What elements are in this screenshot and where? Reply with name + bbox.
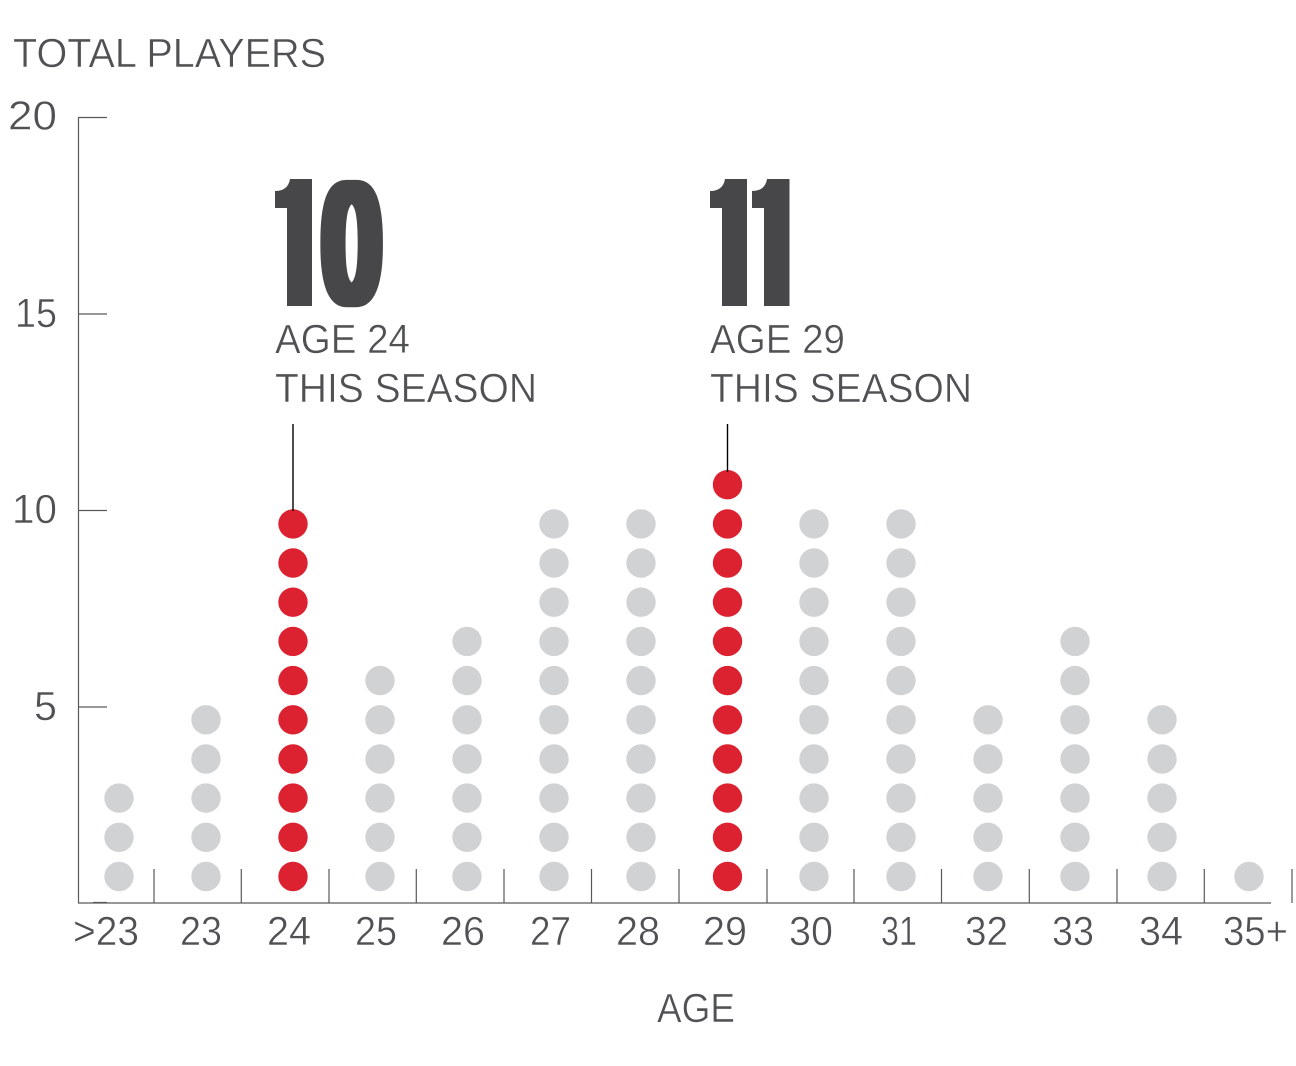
x-axis labels: 34: [1139, 908, 1183, 954]
callout: age 24: [275, 179, 534, 511]
y axis with tick marks: [78, 117, 107, 903]
y-axis labels: 5: [34, 683, 57, 729]
y-axis title: TOTAL PLAYERS: [13, 30, 326, 76]
callout: age 29: [710, 179, 969, 472]
caption: age 24 this season: THIS SEASON: [275, 365, 537, 411]
leader line: [292, 424, 294, 511]
dot column: age 25: [365, 666, 395, 891]
x-axis labels: 26: [441, 908, 485, 954]
dot column: age 32: [973, 705, 1003, 891]
dot column: age 29 highlighted: [713, 470, 742, 891]
x-axis labels: 27: [530, 908, 571, 954]
dot column: under 23: [104, 783, 134, 891]
dot column: age 24 highlighted: [278, 509, 308, 891]
dot column: age 23: [191, 705, 221, 891]
dot column: age 30: [799, 509, 829, 891]
y-axis labels: 20: [8, 92, 57, 138]
dot column: age 31: [886, 509, 916, 891]
big number 10: [275, 179, 383, 308]
dot column: age 27: [539, 509, 569, 891]
caption: age 29 this season: [710, 316, 972, 411]
x-axis labels: 33: [1052, 908, 1094, 954]
x-axis labels: 30: [789, 908, 833, 954]
x-axis labels: >23: [73, 908, 139, 954]
big number 11: [710, 179, 790, 306]
dot column: age 34: [1147, 705, 1177, 891]
x-axis labels: 23: [180, 908, 222, 954]
x-axis labels: 25: [355, 908, 397, 954]
x-axis labels: 29: [703, 908, 747, 954]
caption: age 29 this season: AGE 29: [710, 316, 845, 362]
big number 11: 1: [744, 141, 806, 343]
dot column: 35 and over: [1234, 862, 1264, 891]
dot column: age 33: [1060, 627, 1090, 891]
x-axis labels: 31: [881, 908, 917, 954]
big number 10: 0: [321, 146, 382, 341]
x-axis labels: [73, 908, 1288, 954]
y-axis labels: [8, 92, 57, 729]
caption: age 24 this season: [275, 316, 537, 411]
x-axis labels: 35+: [1223, 908, 1288, 954]
x-axis labels: 28: [616, 908, 660, 954]
x-axis labels: 32: [965, 908, 1008, 954]
y-axis labels: 10: [12, 486, 57, 532]
x-axis title: AGE: [657, 985, 735, 1031]
dot column: age 26: [452, 627, 482, 891]
caption: age 29 this season: THIS SEASON: [710, 365, 972, 411]
x axis with tick marks: [78, 869, 1292, 903]
dot column: age 28: [626, 509, 656, 891]
caption: age 24 this season: AGE 24: [275, 316, 410, 362]
y-axis labels: 15: [15, 290, 57, 336]
big number 10: 1: [268, 141, 329, 343]
leader line: [726, 424, 728, 472]
x-axis labels: 24: [267, 908, 311, 954]
big number 11: 1: [702, 141, 764, 343]
